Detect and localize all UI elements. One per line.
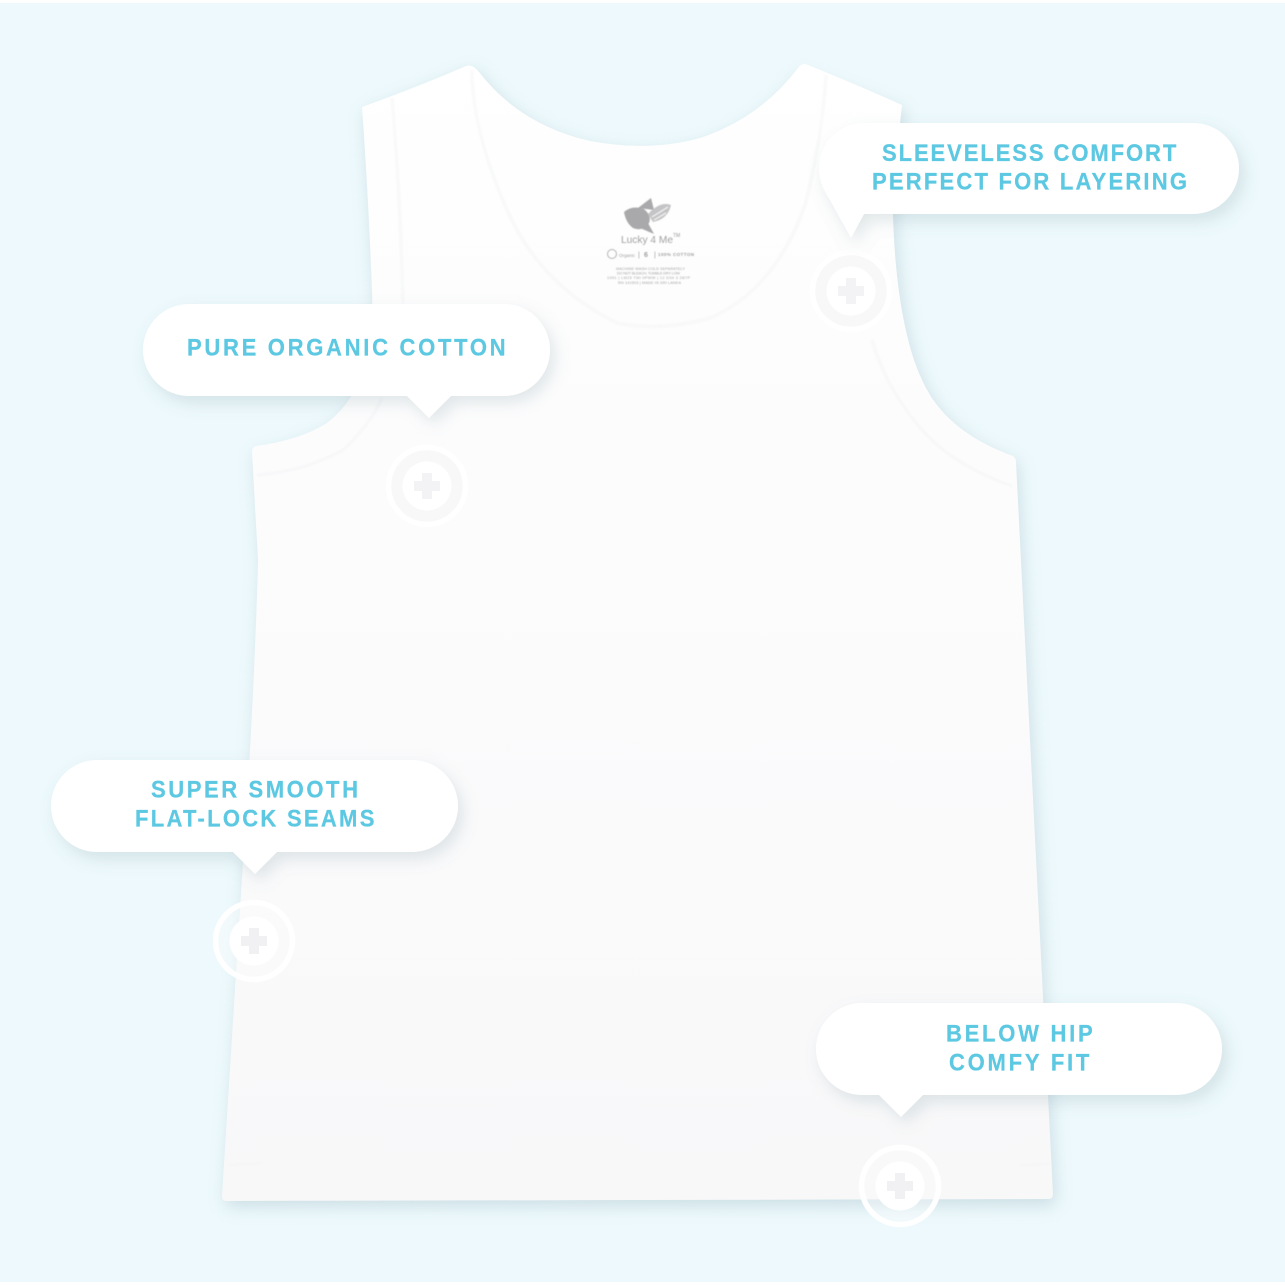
callout bubble: [819, 123, 1239, 238]
label fine print: RN 141503 | MADE IN SRI LANKA: [618, 281, 681, 285]
callout: comfy fit: [816, 1003, 1222, 1117]
neckline and armhole ribbing: [228, 70, 1050, 1165]
marker: fit: [862, 1148, 938, 1224]
garment shadow: [225, 71, 1056, 1207]
icon: fish logo: [624, 198, 671, 234]
label trademark: TM: [673, 233, 680, 239]
marker: organic cotton: [388, 448, 466, 524]
garment label: [607, 198, 694, 285]
callout: organic cotton: [143, 304, 550, 418]
callout text: SUPER SMOOTH: [151, 775, 358, 803]
label fine print: 1991 | LM25 TMI 0PWW | 12 D34 3 2B7P: [607, 276, 690, 280]
marker: sleeveless: [812, 252, 890, 330]
callout bubble: [143, 304, 550, 418]
label fine print: MACHINE WASH COLD SEPARATELY: [616, 267, 685, 271]
label size row: 6: [644, 252, 648, 259]
label fine print: [607, 267, 690, 285]
callout: flat-lock seams: FLAT-LOCK SEAMS: [135, 804, 374, 832]
label brand: Lucky 4 Me: [621, 234, 673, 246]
marker: seams: [216, 902, 292, 980]
label size row: 100% COTTON: [658, 252, 694, 257]
garment body: [222, 64, 1053, 1201]
tank top garment: [222, 64, 1056, 1207]
label size row: Organic: [619, 253, 636, 258]
label size row: |: [654, 252, 656, 259]
callout text: BELOW HIP: [946, 1019, 1093, 1047]
callout bubble: [51, 760, 458, 874]
callout: sleeveless comfort: [819, 123, 1239, 238]
callout: sleeveless comfort: PERFECT FOR LAYERING: [872, 167, 1187, 195]
callout bubble: [816, 1003, 1222, 1117]
callout: comfy fit: COMFY FIT: [949, 1048, 1089, 1076]
label size row: [608, 250, 694, 259]
callout text: SLEEVELESS COMFORT: [882, 139, 1176, 166]
callout: flat-lock seams: [51, 760, 458, 874]
callout text: PURE ORGANIC COTTON: [187, 333, 506, 361]
label size row: |: [638, 252, 640, 259]
label fine print: DO NOT BLEACH, TUMBLE DRY LOW: [617, 272, 680, 276]
